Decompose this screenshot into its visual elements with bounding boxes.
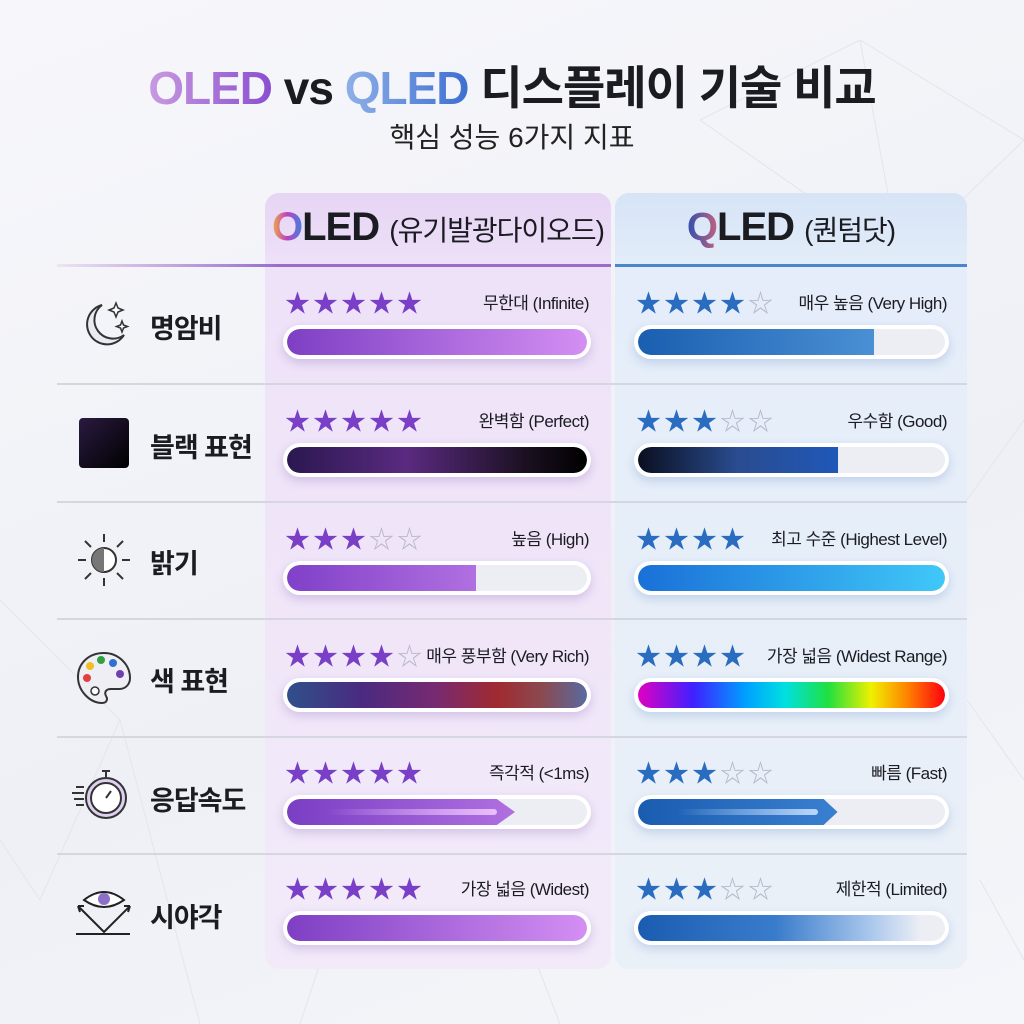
OLED row 3 <box>280 526 594 603</box>
row 1 label: 명암비: 명암비 <box>150 314 222 344</box>
row 5 label: 응답속도: 응답속도 <box>150 786 245 816</box>
icon: eye with angle <box>76 891 131 935</box>
QLED row 3: ★★★★ <box>636 526 748 554</box>
OLED row 1: ★★★★★ <box>285 290 425 318</box>
OLED row 5: ★★★★★ <box>285 760 425 788</box>
panel: OLED column <box>265 193 611 969</box>
OLED row 2: ★★★★★ <box>285 408 425 436</box>
title: OLED vs QLED 디스플레이 기술 비교 <box>148 62 876 114</box>
QLED row 5: ★★★☆☆ <box>636 760 776 788</box>
QLED row 4: 가장 넓음 (Widest Range) <box>767 647 947 666</box>
QLED row 4 <box>630 643 952 720</box>
row 1 label: 명암비 <box>86 301 222 346</box>
OLED row 1: 무한대 (Infinite) <box>483 294 589 313</box>
icon: stopwatch <box>72 770 127 819</box>
QLED row 3 <box>630 526 952 603</box>
QLED row 1: ★★★★☆ <box>636 290 776 318</box>
OLED row 2: 완벽함 (Perfect) <box>479 412 589 431</box>
icon: palette <box>77 652 131 704</box>
QLED row 1 <box>630 290 952 367</box>
icon: moon and stars <box>86 301 130 346</box>
QLED row 3: 최고 수준 (Highest Level) <box>771 530 947 549</box>
OLED row 4 <box>280 643 594 720</box>
row 4 label: 색 표현 <box>77 652 228 704</box>
heading: QLED: QLED (퀀텀닷) <box>687 205 895 249</box>
row 3 label: 밝기 <box>78 534 198 586</box>
OLED row 2 <box>280 408 594 485</box>
OLED row 3: 높음 (High) <box>511 530 589 549</box>
OLED row 5: 즉각적 (<1ms) <box>489 764 589 783</box>
row 5 label: 응답속도 <box>72 770 246 819</box>
row 3 label: 밝기: 밝기 <box>150 549 198 579</box>
row 2 label: 블랙 표현: 블랙 표현 <box>150 433 252 463</box>
row 4 label: 색 표현: 색 표현 <box>150 667 228 697</box>
row 6 label: 시야각: 시야각 <box>150 903 222 933</box>
QLED row 5 <box>630 760 952 837</box>
subtitle: 핵심 성능 6가지 지표 <box>390 122 634 153</box>
panel: QLED column <box>615 193 967 969</box>
icon: black square <box>79 418 129 468</box>
OLED row 6 <box>280 876 594 953</box>
OLED row 4: ★★★★☆ <box>285 643 425 671</box>
OLED row 1 <box>280 290 594 367</box>
OLED row 5 <box>280 760 594 837</box>
QLED row 4: ★★★★ <box>636 643 748 671</box>
QLED row 6: 제한적 (Limited) <box>836 880 947 899</box>
row 2 label: 블랙 표현 <box>79 418 252 468</box>
QLED row 6 <box>630 876 952 953</box>
OLED row 3: ★★★☆☆ <box>285 526 425 554</box>
QLED row 2 <box>630 408 952 485</box>
OLED row 6: 가장 넓음 (Widest) <box>461 880 589 899</box>
row 6 label: 시야각 <box>76 891 222 935</box>
QLED row 5: 빠름 (Fast) <box>871 764 947 783</box>
QLED row 6: ★★★☆☆ <box>636 876 776 904</box>
OLED row 6: ★★★★★ <box>285 876 425 904</box>
QLED row 1: 매우 높음 (Very High) <box>798 294 947 313</box>
OLED row 4: 매우 풍부함 (Very Rich) <box>426 647 589 666</box>
QLED row 2: ★★★☆☆ <box>636 408 776 436</box>
QLED row 2: 우수함 (Good) <box>847 412 947 431</box>
heading: OLED: OLED (유기발광다이오드) <box>272 205 604 249</box>
icon: sun <box>78 534 130 586</box>
